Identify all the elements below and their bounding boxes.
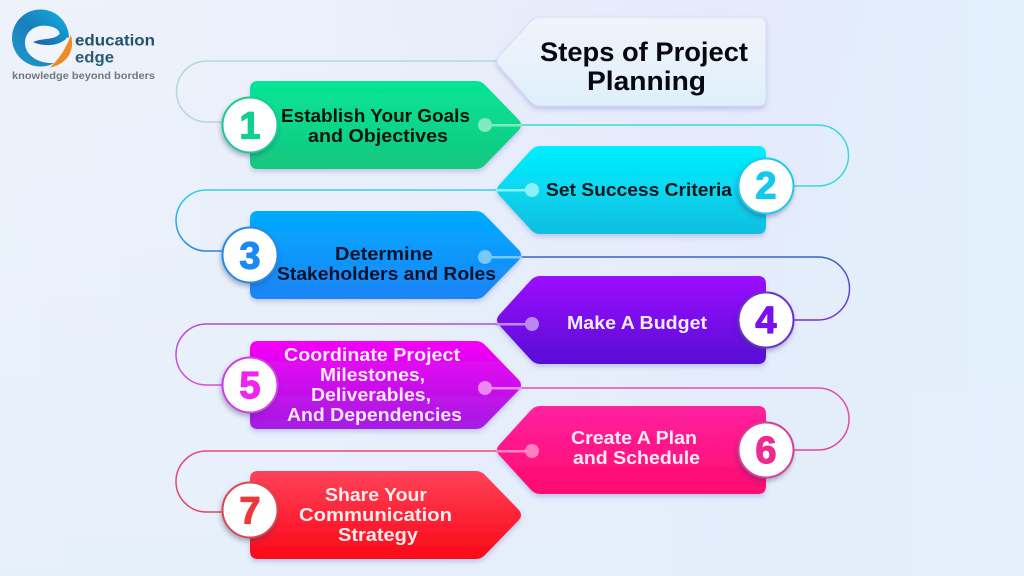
title: Steps of Project	[540, 37, 748, 67]
connector: step 4 to step 5	[176, 324, 498, 385]
logo: education edge: edge	[75, 50, 114, 66]
text: step 7	[299, 485, 452, 545]
text: step 1: and Objectives	[308, 126, 448, 146]
badge: number 7: 7	[239, 490, 261, 532]
text: step 3: Determine	[335, 244, 433, 264]
text: step 6: Create A Plan	[571, 428, 697, 448]
text: step 4: Make A Budget	[567, 313, 707, 333]
logo tagline: knowledge beyond borders	[12, 71, 155, 82]
step 4	[496, 276, 794, 364]
step 3	[222, 211, 522, 299]
text: step 7: Share Your	[325, 485, 427, 505]
text: step 7: Communication	[299, 505, 452, 525]
node: step 6	[496, 444, 539, 458]
text: step 5: Milestones,	[320, 365, 425, 385]
panel: step 1 arrow	[250, 81, 521, 169]
text: step 7: Strategy	[338, 525, 418, 545]
panel: step 7 arrow	[250, 471, 521, 559]
badge: number 2	[738, 158, 794, 214]
text: step 5: Coordinate Project	[284, 345, 460, 365]
step 2	[496, 146, 794, 234]
text: step 2: Set Success Criteria	[546, 180, 733, 200]
text: step 6: and Schedule	[573, 448, 700, 468]
connector: title to step 1	[177, 61, 497, 122]
badge: number 3: 3	[239, 236, 261, 278]
panel: step 3 arrow	[250, 211, 521, 299]
badge: number 2: 2	[755, 166, 777, 208]
badge: number 4: 4	[755, 300, 777, 342]
badge: number 7	[222, 482, 278, 538]
text: step 5: Deliverables,	[311, 385, 431, 405]
panel: step 5 arrow	[250, 341, 521, 429]
node: step 3	[478, 250, 522, 264]
icon: swirl e mark	[12, 10, 72, 68]
text: step 6	[571, 428, 700, 468]
logo: education edge	[12, 10, 155, 82]
badge: number 1: 1	[239, 106, 261, 148]
connector: step 6 to step 7	[176, 451, 498, 512]
text: step 3: Stakeholders and Roles	[277, 264, 496, 284]
panel: step 2 arrow	[497, 146, 766, 234]
node: step 2	[496, 183, 539, 197]
step 1	[222, 81, 522, 169]
badge: number 5	[222, 358, 278, 412]
badge: number 5: 5	[239, 365, 261, 407]
connector: step 3 to step 4	[520, 257, 850, 320]
panel: step 4 arrow	[497, 276, 766, 364]
text: step 5: And Dependencies	[287, 405, 462, 425]
panel: step 6 arrow	[497, 406, 766, 494]
badge: number 3	[222, 228, 278, 282]
node: step 5	[478, 381, 522, 395]
text: step 1: Establish Your Goals	[281, 106, 470, 126]
connector: step 2 to step 3	[176, 190, 498, 251]
badge: number 6	[738, 422, 794, 478]
step 6	[496, 406, 794, 494]
badge: number 4	[738, 292, 794, 348]
badge: number 1	[222, 98, 278, 152]
text: step 3	[277, 244, 496, 284]
panel: title banner	[497, 17, 766, 106]
step 7	[222, 471, 521, 559]
logo wordmark: education	[75, 32, 155, 50]
title	[540, 37, 748, 96]
connector: step 1 to step 2	[520, 125, 848, 186]
step 5	[222, 341, 522, 429]
text: step 5	[284, 345, 462, 425]
text: step 1	[281, 106, 470, 146]
node: step 4	[496, 317, 539, 331]
connector: step 5 to step 6	[520, 388, 849, 450]
node: step 1	[478, 118, 522, 132]
badge: number 6: 6	[755, 430, 777, 472]
title: Planning	[587, 66, 706, 96]
